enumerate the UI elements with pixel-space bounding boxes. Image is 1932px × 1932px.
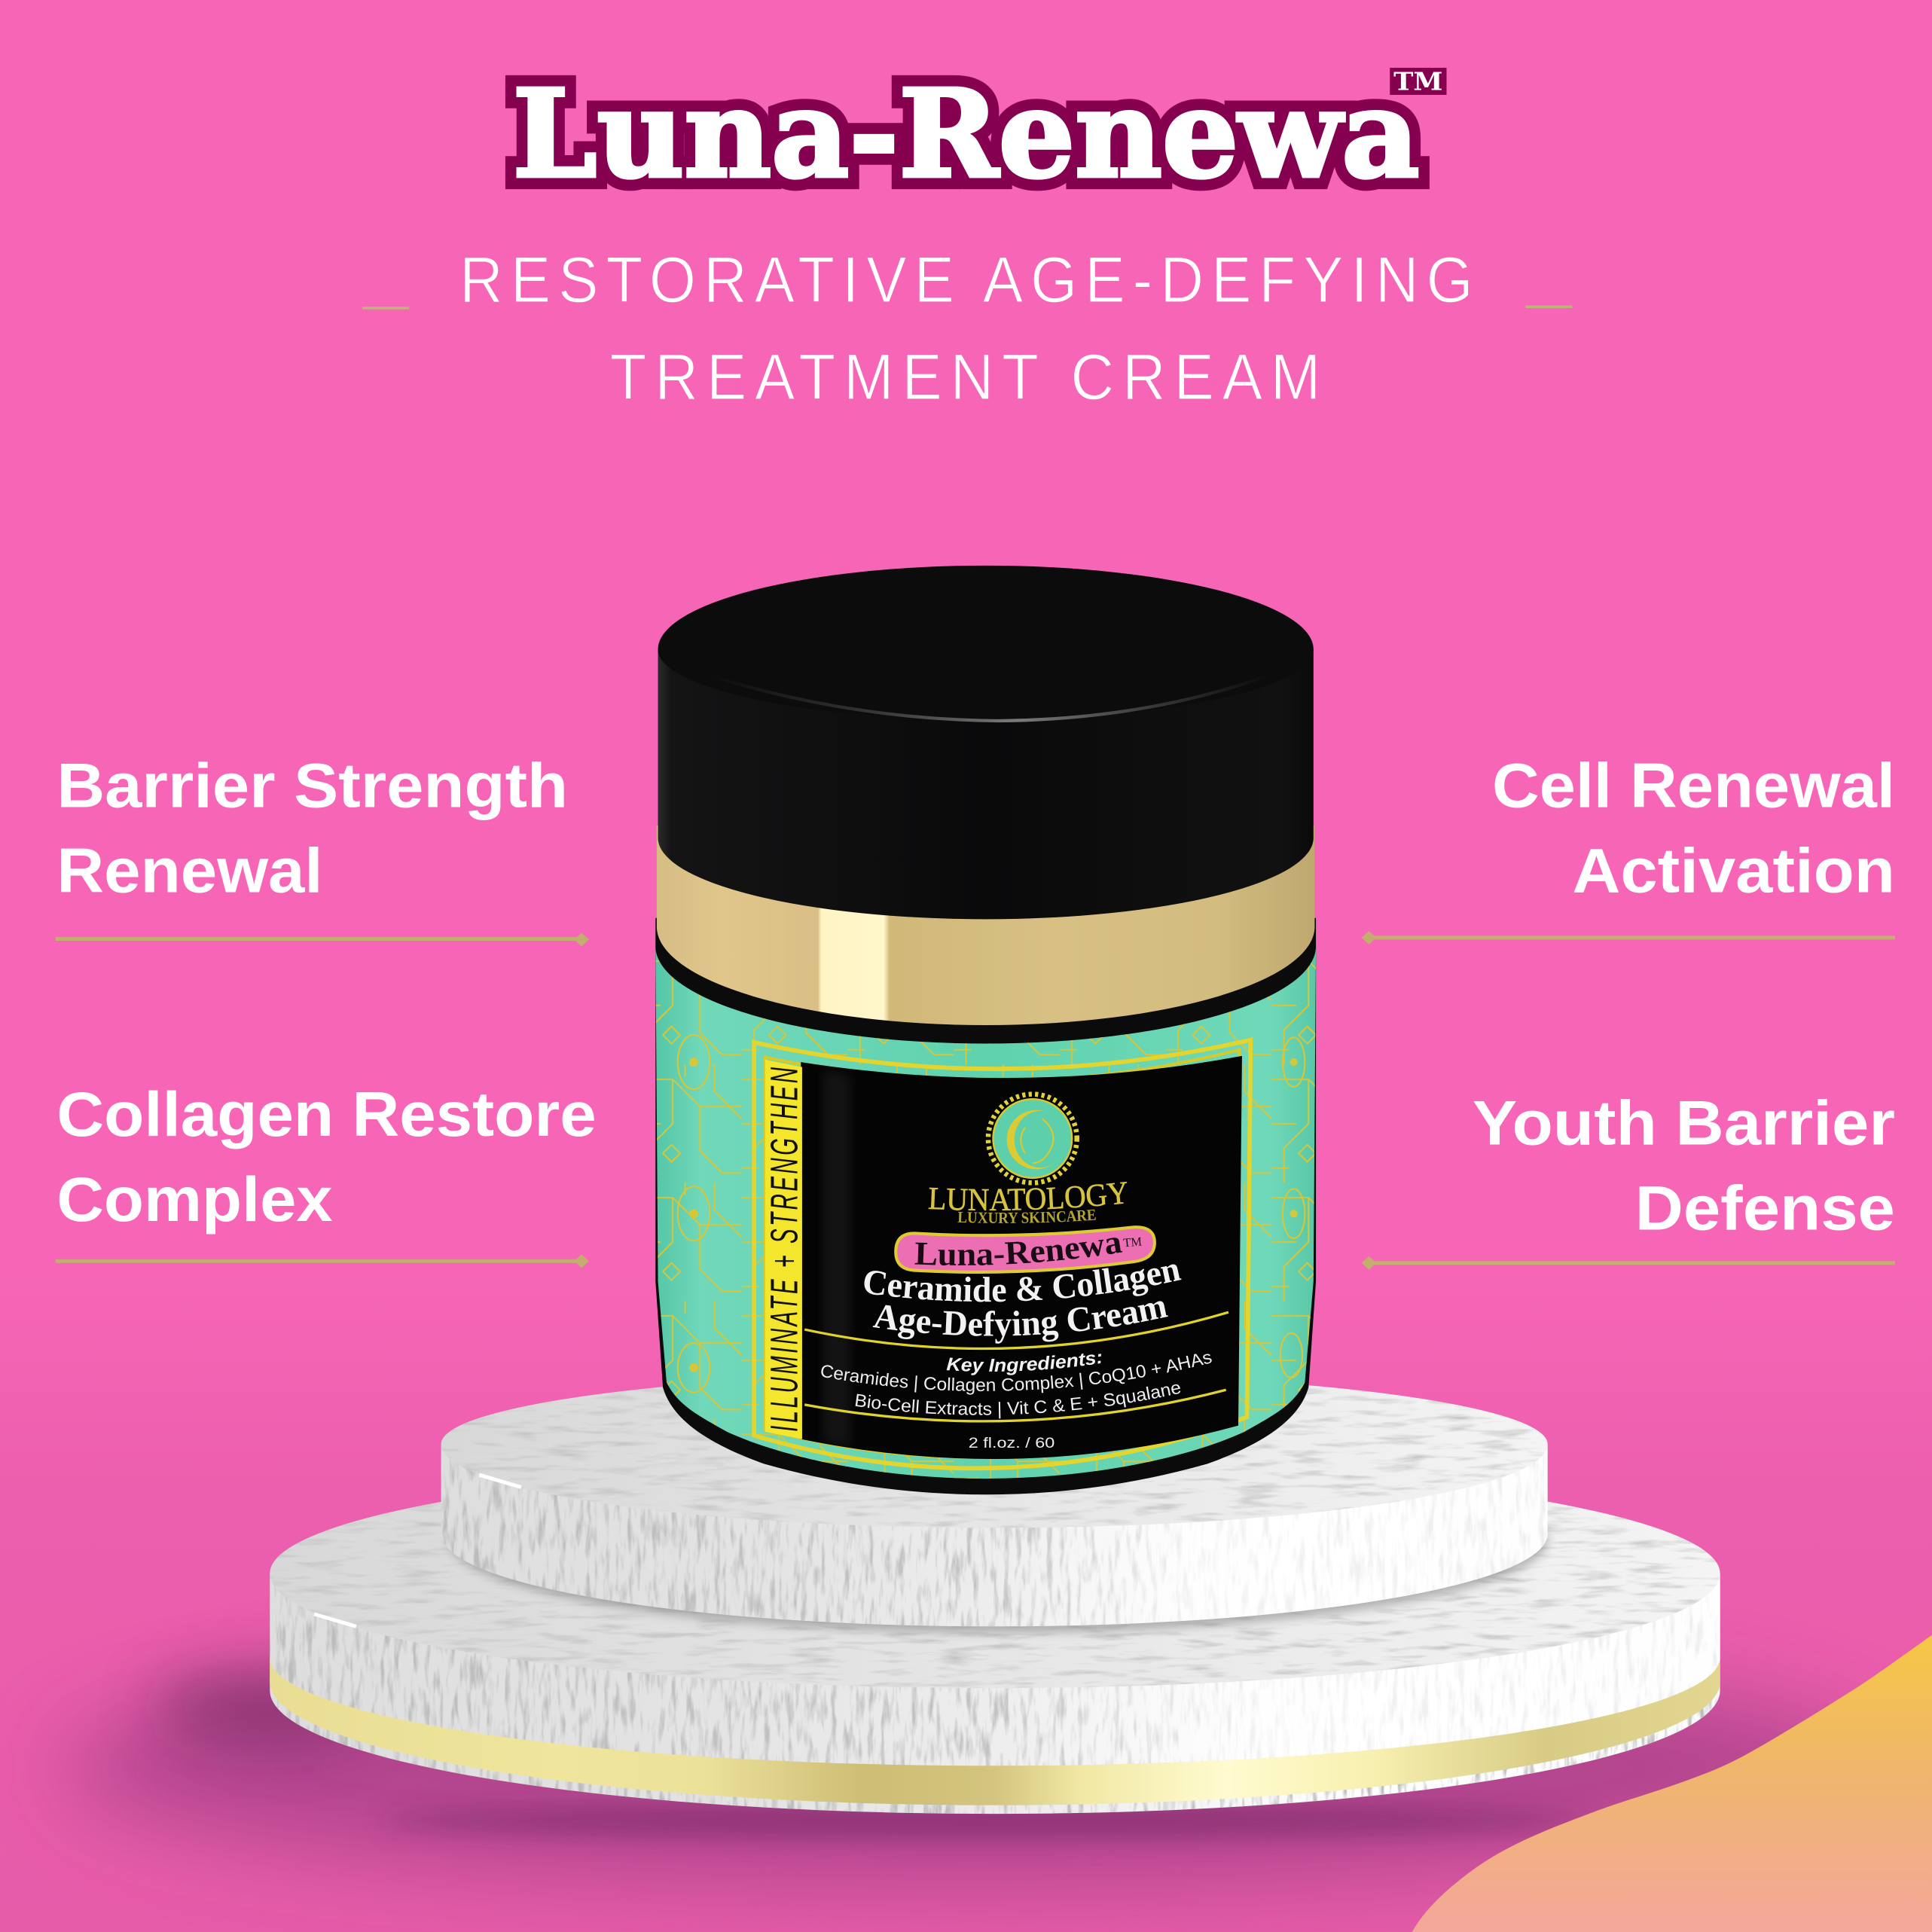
gold rule upper (804, 1312, 1228, 1349)
product name pill: Luna-Renewa (914, 1238, 1122, 1265)
lower pedestal gold band (270, 1657, 1720, 1805)
black label panel (801, 1056, 1242, 1459)
upper pedestal (441, 1372, 1548, 1632)
product title line 2: Age-Defying Cream (872, 1301, 1168, 1344)
upper pedestal side (441, 1444, 1548, 1626)
title: Luna-Renewa (513, 63, 1419, 205)
net volume: 2 fl.oz. / 60 (969, 1435, 1055, 1451)
label gold frame (754, 1040, 1250, 1468)
upper pedestal highlight (479, 1475, 521, 1487)
pedestal cast shadow (62, 1651, 1885, 1885)
brand tagline: LUXURY SKINCARE (957, 1210, 1096, 1223)
lower pedestal side (270, 1573, 1720, 1814)
brand name: LUNATOLOGY (928, 1181, 1127, 1211)
ingredients line 1: Ceramides | Collagen Complex | CoQ10 + AHAs (819, 1348, 1214, 1396)
feature: Youth Barrier Defense: Defense (1635, 1173, 1895, 1244)
gold collar (657, 826, 1314, 1025)
feature: Youth Barrier Defense: Youth Barrier (1473, 1088, 1895, 1158)
product jar (655, 565, 1317, 1494)
key ingredients heading: Key Ingredients: (946, 1353, 1101, 1375)
label circle ornaments (678, 1035, 1305, 1393)
brand seal icon (988, 1094, 1077, 1183)
teal label (647, 936, 1325, 1491)
title: Luna-Renewa (513, 63, 1419, 205)
trademark: TM (1393, 66, 1443, 96)
subtitle: RESTORATIVE AGE-DEFYING (459, 243, 1473, 316)
lower pedestal right fade (270, 1573, 1720, 1766)
upper pedestal contact shadow (448, 1448, 1548, 1632)
gold rule lower (804, 1390, 1226, 1421)
feature: Barrier Strength Renewal (56, 749, 589, 946)
product name pill: TM (1123, 1234, 1143, 1250)
lid rim sheen (709, 675, 1269, 721)
ingredients line 2: Bio-Cell Extracts | Vit C & E + Squalane (853, 1378, 1183, 1420)
feature: Youth Barrier Defense (1362, 1088, 1895, 1270)
decorative corner wave (1412, 1635, 1932, 1932)
lower pedestal (270, 1463, 1720, 1814)
yellow side strip (762, 1060, 805, 1439)
lid side (658, 649, 1314, 919)
panel gloss (823, 1070, 850, 1448)
subtitle (459, 243, 1473, 414)
feature: Barrier Strength Renewal: Barrier Strength (56, 749, 568, 820)
feature: Barrier Strength Renewal: Renewal (56, 835, 323, 905)
lower pedestal highlight (314, 1614, 356, 1626)
feature: Collagen Restore Complex: Collagen Restore (56, 1079, 597, 1149)
jar body (655, 918, 1316, 1494)
upper pedestal right fade (441, 1444, 1548, 1626)
lid top (658, 566, 1314, 719)
feature: Cell Renewal Activation: Activation (1572, 835, 1895, 905)
product title line 1: Ceramide & Collagen (865, 1264, 1181, 1302)
subtitle side dashes (362, 306, 1572, 310)
feature: Collagen Restore Complex: Complex (56, 1164, 333, 1235)
feature: Collagen Restore Complex (56, 1079, 597, 1268)
label inner frame (765, 1050, 1240, 1457)
lower pedestal top (270, 1463, 1720, 1688)
feature: Cell Renewal Activation: Cell Renewal (1492, 749, 1895, 820)
subtitle: TREATMENT CREAM (610, 340, 1320, 414)
upper pedestal top (441, 1372, 1548, 1528)
strip text: ILLUMINATE + STRENGTHEN (762, 1067, 805, 1432)
feature: Cell Renewal Activation (1362, 749, 1895, 945)
